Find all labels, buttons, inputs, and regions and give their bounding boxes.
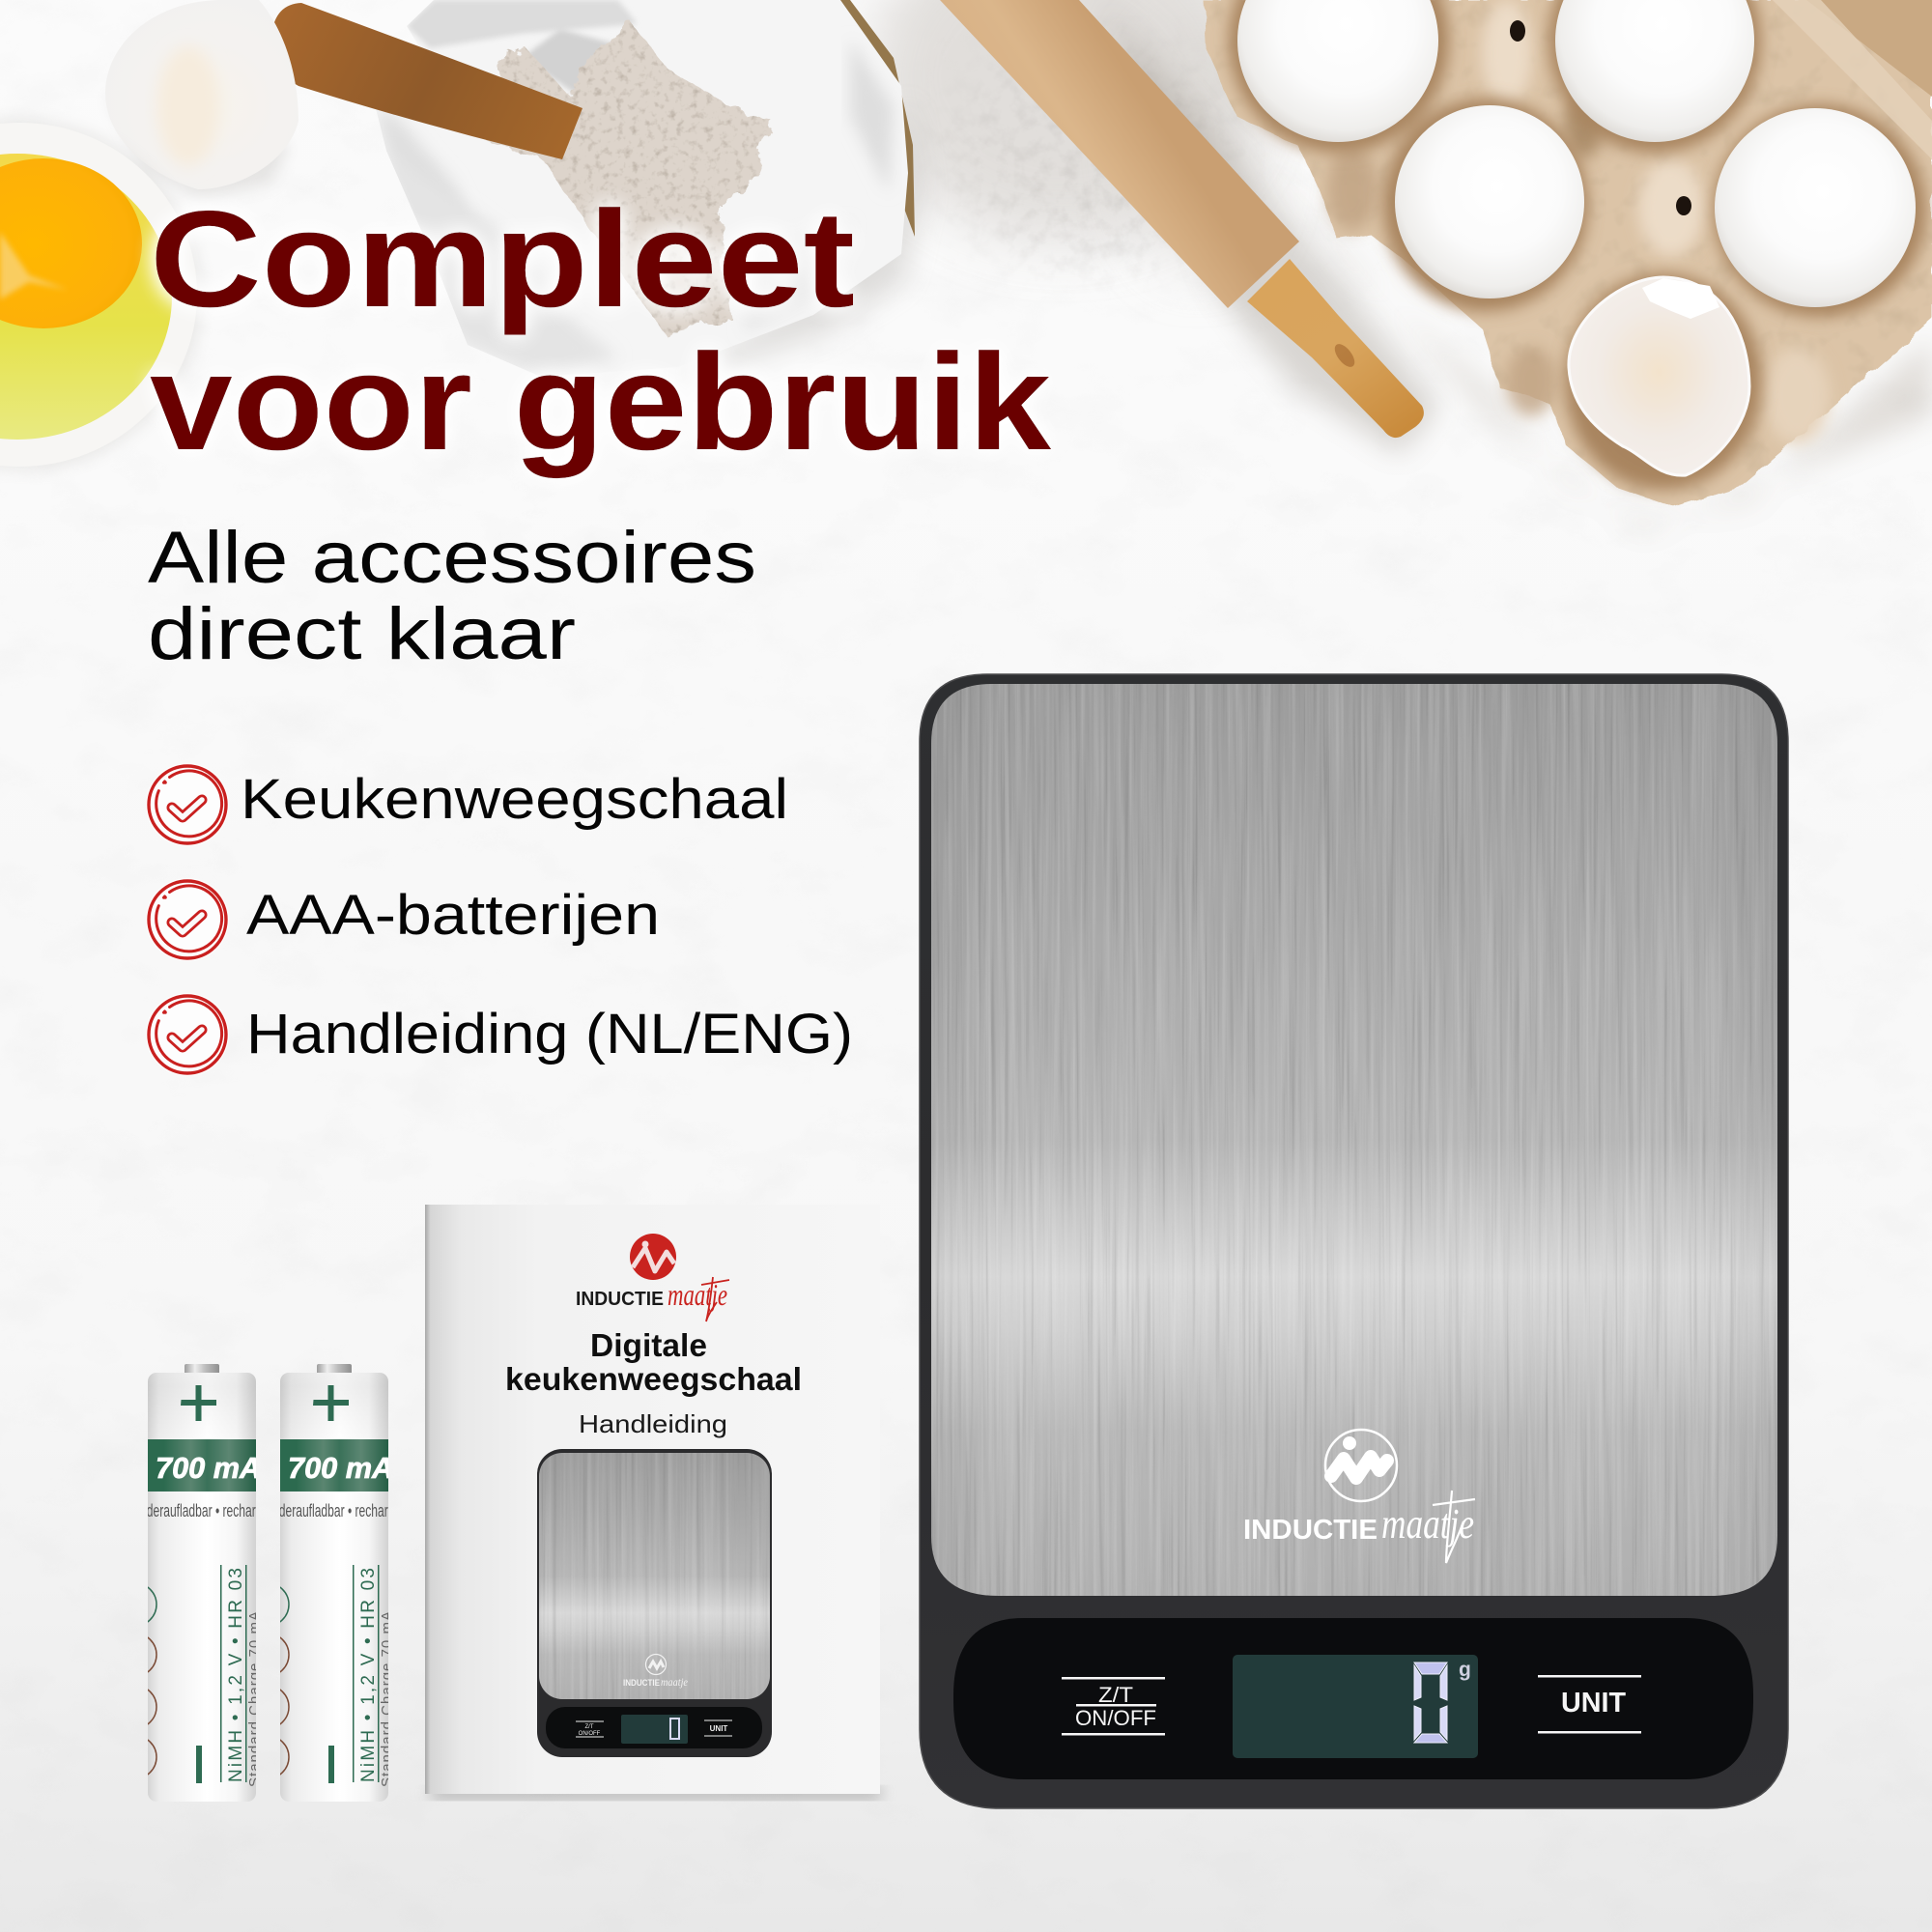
recycling symbols xyxy=(148,1586,157,1776)
flour xyxy=(488,21,773,334)
icon: check 3 xyxy=(146,993,229,1076)
logo on plate: INDUCTIE xyxy=(1243,1515,1378,1546)
mini scale image: INDUCTIE xyxy=(623,1678,660,1688)
checklist xyxy=(146,763,853,1076)
side spec text xyxy=(196,1565,256,1786)
photo: bag of flour with wooden spoon xyxy=(271,0,923,382)
title xyxy=(150,183,1052,479)
booklet heading xyxy=(505,1327,802,1397)
carton wells xyxy=(1229,0,1926,490)
booklet logo: maatje xyxy=(668,1277,727,1312)
button: UNIT: UNIT xyxy=(1561,1688,1626,1719)
carton holes xyxy=(1510,20,1525,42)
booklet logo xyxy=(576,1234,729,1321)
label: Handleiding (NL/ENG): Handleiding (NL/ENG) xyxy=(246,1003,853,1065)
label: Keukenweegschaal: Keukenweegschaal xyxy=(241,768,788,831)
mini scale image: Z/T xyxy=(585,1724,594,1730)
mini scale image: ON/OFF xyxy=(579,1731,601,1737)
mini scale image: UNIT xyxy=(710,1724,727,1733)
booklet heading: keukenweegschaal xyxy=(505,1361,802,1397)
side spec text: NiMH • 1,2 V • HR 03 xyxy=(358,1568,379,1782)
photo: rolling pin xyxy=(940,0,1439,454)
title: voor gebruik xyxy=(150,326,1052,479)
cloth edge xyxy=(811,0,915,237)
carton shadow xyxy=(1246,135,1932,531)
recycling symbols xyxy=(246,1583,289,1778)
egg xyxy=(1237,0,1438,142)
mini scale image: maatje xyxy=(661,1675,689,1689)
display xyxy=(1233,1655,1478,1758)
photo: egg shell xyxy=(105,0,298,198)
brushed steel plate xyxy=(931,684,1777,1596)
side spec text xyxy=(328,1565,395,1787)
side spec text: Standard Charge 70 mA xyxy=(379,1611,395,1787)
logo on plate xyxy=(1243,1430,1475,1563)
scale body xyxy=(920,674,1788,1808)
subtitle xyxy=(148,517,756,675)
side spec text: NiMH • 1,2 V • HR 03 xyxy=(226,1568,246,1782)
button: Z/T ON/OFF: Z/T xyxy=(1098,1683,1133,1707)
egg xyxy=(1555,0,1754,142)
green capacity band xyxy=(280,1439,388,1492)
carton back flap xyxy=(1806,0,1932,97)
button: Z/T ON/OFF: ON/OFF xyxy=(1075,1706,1156,1730)
control panel xyxy=(953,1618,1753,1779)
photo: bowl with egg yolk xyxy=(0,121,201,469)
battery 2: Wiederaufladbar • rechargeable xyxy=(259,1501,423,1520)
battery 2: 700 mAh xyxy=(288,1451,412,1485)
logo on plate: maatje xyxy=(1381,1500,1474,1548)
label: AAA-batterijen: AAA-batterijen xyxy=(246,884,660,947)
battery 2 xyxy=(280,1364,388,1802)
side spec text: Standard Charge 70 mA xyxy=(246,1611,263,1787)
photo: egg carton with eggs xyxy=(1203,0,1932,531)
kitchen scale xyxy=(920,674,1788,1808)
wooden spoon xyxy=(271,3,582,159)
green capacity band xyxy=(148,1439,256,1492)
bag shadow xyxy=(676,97,923,382)
subtitle: Alle accessoires xyxy=(148,517,756,599)
icon: check 1 xyxy=(146,763,229,846)
paper bag xyxy=(376,0,908,377)
booklet subheading: Handleiding xyxy=(579,1409,727,1438)
title: Compleet xyxy=(150,183,855,336)
broken egg shell xyxy=(1569,277,1749,475)
icon: check 2 xyxy=(146,878,229,961)
carton creases xyxy=(1327,0,1830,444)
battery 1: 700 mAh xyxy=(156,1451,279,1485)
display: g xyxy=(1459,1659,1471,1681)
button: Z/T ON/OFF xyxy=(1062,1677,1165,1735)
carton xyxy=(1203,0,1932,507)
mini scale image xyxy=(537,1449,772,1757)
button: UNIT xyxy=(1538,1675,1641,1733)
plus sign xyxy=(313,1385,349,1421)
subtitle: direct klaar xyxy=(148,593,576,675)
egg xyxy=(1715,108,1916,307)
plus sign xyxy=(181,1385,216,1421)
battery 1 xyxy=(148,1364,256,1802)
egg xyxy=(1395,105,1584,298)
booklet heading: Digitale xyxy=(590,1327,707,1363)
manual booklet xyxy=(425,1205,881,1799)
battery 1: Wiederaufladbar • rechargeable xyxy=(127,1501,291,1520)
digit zero xyxy=(1414,1662,1447,1743)
booklet logo: INDUCTIE xyxy=(576,1289,664,1310)
